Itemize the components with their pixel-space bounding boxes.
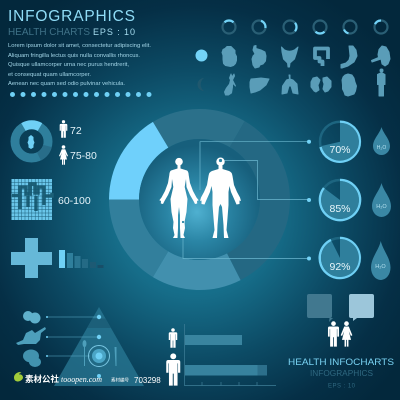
pixel heart chart (12, 179, 52, 220)
body text: Quisque ullamcorper urna nec purus hendrerit, (8, 62, 129, 68)
highlighted segment (109, 122, 168, 200)
bar long tip (258, 365, 267, 376)
male body (200, 158, 241, 238)
speech bubble left (307, 294, 333, 322)
organ glyphs row 1 (222, 46, 390, 96)
body text: Aliquam fringilla lectus quis nulla convallis rhoncus. (8, 53, 140, 59)
value: 85% (329, 203, 351, 215)
body text: Aenean nec quam sed odio pulvinar vehicula. (8, 81, 125, 87)
watermark url: tooopen.com (61, 374, 102, 384)
panel: title block (8, 8, 152, 97)
bar steps (59, 250, 104, 268)
panel: health infocharts (288, 294, 394, 390)
panel: food pyramid (16, 307, 144, 386)
female body (160, 158, 198, 238)
dot row (10, 92, 152, 97)
value: 92% (329, 261, 351, 273)
icon: moon dot (198, 78, 204, 91)
panel: height bars (166, 324, 276, 386)
pyramid (54, 307, 144, 386)
pyramid band (87, 318, 111, 328)
icon: lungs (282, 75, 298, 94)
drop 2 (372, 183, 391, 217)
icon: brain blob (222, 46, 236, 66)
panel: vitals left (11, 120, 104, 278)
icon: person (378, 73, 385, 96)
marker: leg point (182, 221, 184, 223)
subtitle: HEALTH CHARTS (8, 26, 90, 38)
watermark id: 素材编号 (111, 376, 129, 384)
bar long (185, 365, 267, 376)
icon: food middle (16, 327, 46, 345)
body text: Lorem ipsum dolor sit amet, consectetur adipiscing elit. (8, 43, 151, 49)
icon: stomach (341, 46, 357, 68)
icon: kidney (372, 46, 390, 66)
icon: couple (328, 321, 352, 347)
donut chart (15, 125, 48, 158)
connector dots (307, 140, 311, 260)
panel: organ icons (196, 20, 390, 96)
eps: EPS : 10 (328, 384, 356, 390)
connector lines (183, 142, 309, 258)
drop 1 (373, 127, 390, 155)
value: 75-80: 75-80 (70, 150, 97, 162)
icon: watermark logo (14, 372, 23, 382)
icon: gallbladder (224, 74, 236, 95)
axis (184, 324, 276, 386)
pie 70% (320, 122, 360, 162)
pie 85% (320, 180, 360, 220)
ring base lower left (109, 200, 168, 277)
body text (8, 43, 151, 87)
subheading: INFOGRAPHICS (310, 369, 373, 378)
drop 3 (371, 241, 390, 280)
ring bottom segment (153, 251, 241, 290)
icon: donut centre organ (20, 130, 44, 154)
icon: person head (380, 68, 384, 72)
body text: et consequat quam ullamcorper. (8, 72, 91, 78)
bar short (185, 335, 242, 345)
drop 1: H₂O (377, 145, 386, 151)
icon: kidneys (311, 77, 331, 92)
pie 92% (320, 238, 360, 278)
icon: food top (23, 311, 40, 324)
value: 72: 72 (70, 125, 82, 137)
value: 60-100: 60-100 (58, 195, 91, 207)
icon: woman (59, 145, 68, 165)
inner disc (139, 139, 260, 260)
title: INFOGRAPHICS (8, 8, 135, 25)
icon: food bottom (23, 350, 41, 367)
icon: man (60, 120, 67, 138)
icon: plate (82, 340, 116, 366)
speech bubble right (349, 294, 374, 321)
drop 3: H₂O (375, 264, 386, 270)
icon: active dot (196, 50, 208, 62)
value: 70% (329, 144, 351, 156)
watermark brand: 素材公社 (25, 374, 60, 384)
icon: intestine (315, 48, 328, 66)
icon: small man (169, 328, 177, 348)
icon: brain blob lower (342, 74, 356, 96)
icon: bladder (282, 47, 298, 67)
panel: hydration pies (307, 122, 391, 280)
marker: head point (219, 159, 222, 162)
ring right segment (227, 121, 290, 280)
drop 2: H₂O (376, 204, 387, 210)
pyramid connectors (47, 317, 99, 356)
panel: central ring (109, 109, 309, 290)
watermark number: 703298 (134, 376, 161, 385)
icon: large man (166, 353, 180, 386)
eps label: EPS : 10 (93, 27, 135, 37)
watermark (14, 372, 161, 385)
icon: liver (250, 78, 269, 93)
progress rings (222, 20, 388, 34)
icon: medical cross (11, 238, 52, 278)
icon: spleen (252, 46, 266, 68)
heading: HEALTH INFOCHARTS (288, 357, 394, 368)
pyramid dots (46, 315, 101, 378)
ring top segment (153, 109, 245, 148)
